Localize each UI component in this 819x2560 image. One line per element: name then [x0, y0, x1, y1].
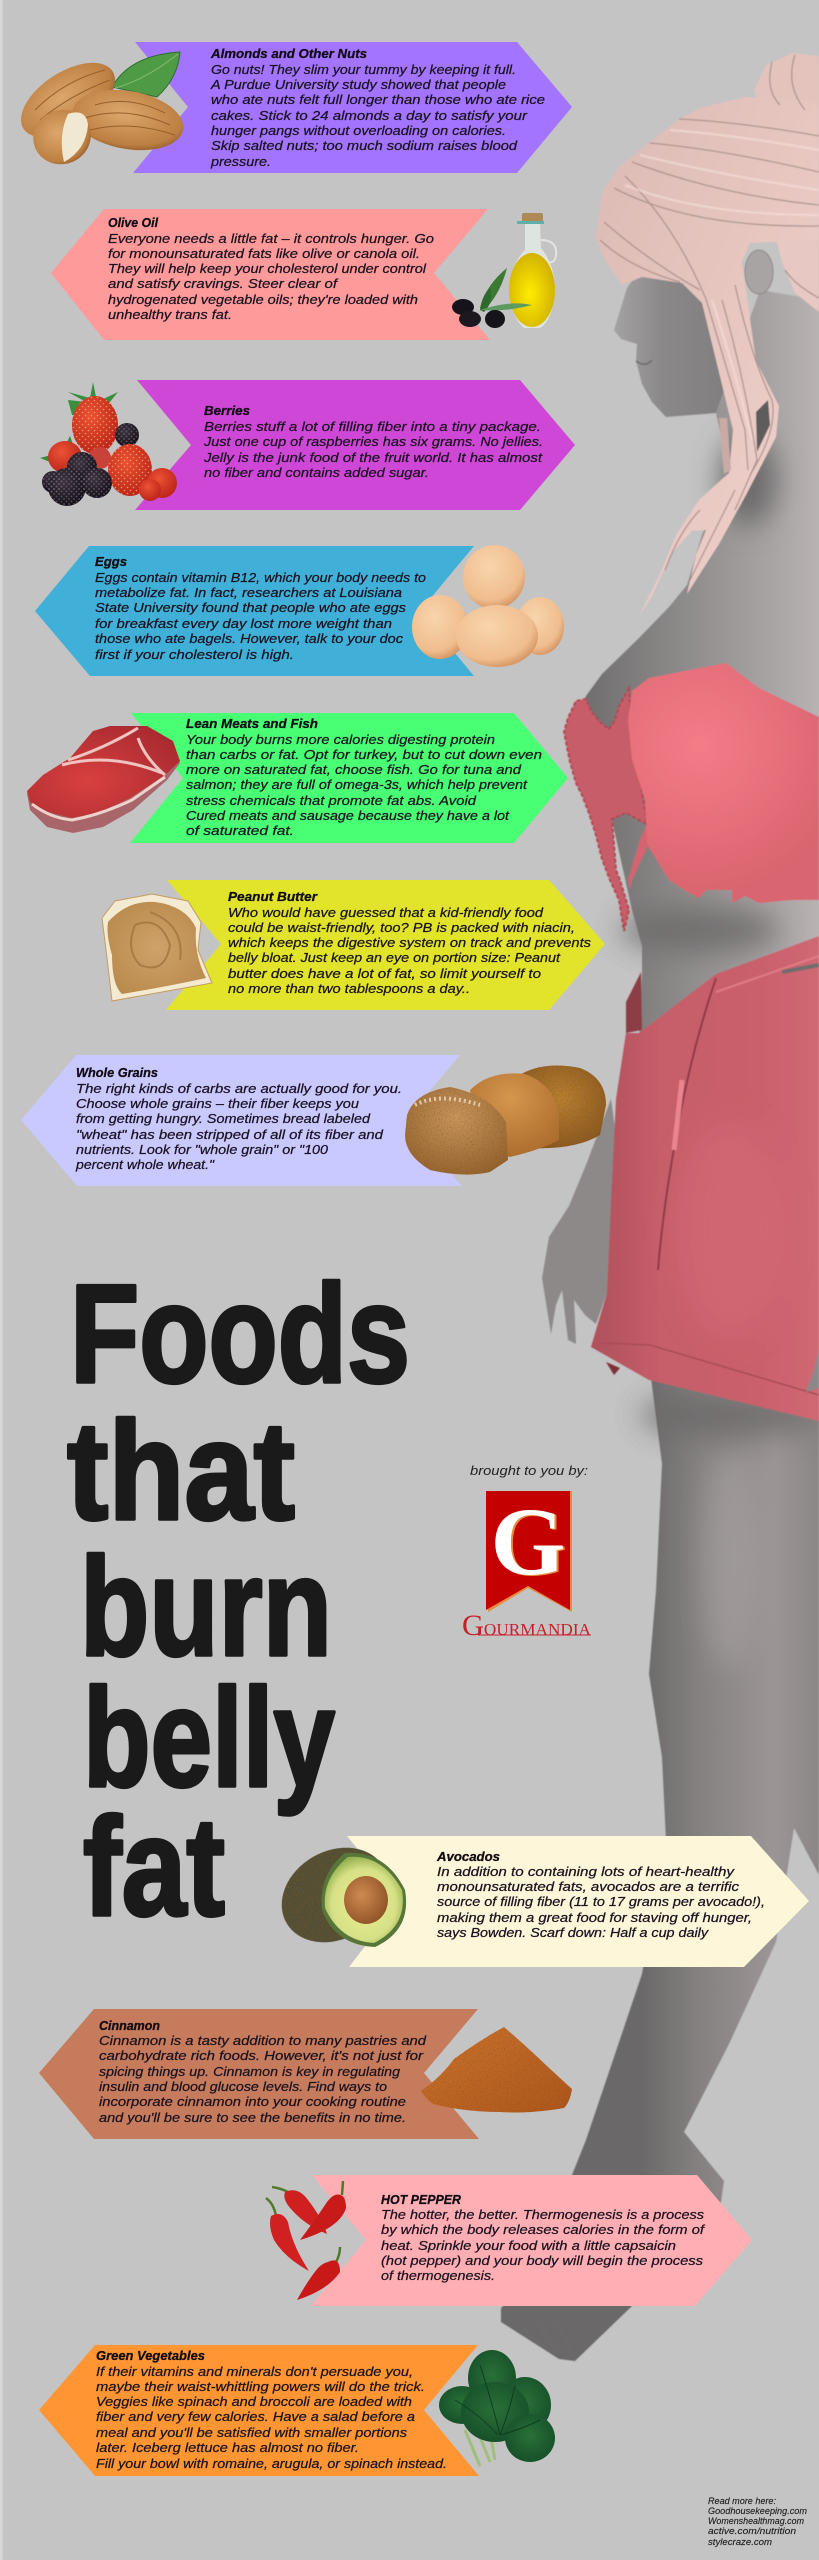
text block: lean meats and fish: of saturated fat.: [186, 823, 294, 838]
sources list: active.com/nutrition: [708, 2526, 796, 2537]
arrow banner: [51, 209, 490, 340]
panel: cinnamon: [39, 2009, 572, 2139]
text block: almonds: hunger pangs without overloading on calories.: [211, 123, 506, 138]
heading: eggs: Eggs: [95, 554, 127, 569]
text block: eggs: for breakfast every day lost more weight than: [95, 616, 392, 631]
text block: whole grains: The right kinds of carbs are actually good for you.: [76, 1081, 402, 1096]
text block: olive oil: They will help keep your cholesterol under control: [108, 261, 427, 276]
panel: eggs: [35, 540, 564, 676]
text block: lean meats and fish: salmon; they are full of omega-3s, which help prevent: [186, 777, 529, 792]
text block: avocados: says Bowden. Scarf down: Half a cup daily: [437, 1925, 710, 1940]
arrow banner: [347, 1836, 809, 1967]
arrow banner: [39, 2345, 479, 2476]
figure: arm and hand: [542, 1099, 625, 1344]
text block: avocados: monounsaturated fats, avocados are a terrific: [437, 1879, 740, 1894]
text block: whole grains: percent whole wheat.": [75, 1157, 215, 1172]
caption: brought to you by: brought to you by:: [470, 1463, 588, 1478]
text block: peanut butter: belly bloat. Just keep an eye on portion size: Peanut: [228, 950, 562, 965]
text block: peanut butter: no more than two tablespoons a day..: [228, 981, 470, 996]
icon: eggs: [412, 540, 564, 667]
text block: almonds: who ate nuts felt full longer than those who ate rice: [211, 92, 545, 107]
heading: whole grains: Whole Grains: [76, 1065, 158, 1080]
sources list: Womenshealthmag.com: [708, 2516, 804, 2527]
figure: neck and torso: [575, 290, 819, 1040]
text block: avocados: making them a great food for staving off hunger,: [437, 1910, 752, 1925]
sources list: [708, 2496, 807, 2548]
icon: bread loaves: [405, 1066, 606, 1175]
text block: green vegetables: meal and you'll be satisfied with smaller portions: [96, 2425, 408, 2440]
panel: berries: [40, 380, 575, 510]
arrow banner: [130, 713, 568, 843]
text block: olive oil: and satisfy cravings. Steer clear of: [108, 276, 339, 291]
arrow banner: [133, 42, 572, 173]
panel: olive oil: [51, 209, 556, 340]
text block: berries: Berries stuff a lot of filling fiber into a tiny package.: [204, 419, 541, 434]
text block: cinnamon: Cinnamon is a tasty addition to many pastries and: [99, 2033, 427, 2048]
sources list: Goodhousekeeping.com: [708, 2506, 807, 2517]
text block: hot pepper: heat. Sprinkle your food with a little capsaicin: [381, 2238, 676, 2253]
text block: almonds: A Purdue University study showed that people: [210, 77, 506, 92]
text block: whole grains: [75, 1081, 402, 1172]
text block: olive oil: unhealthy trans fat.: [108, 307, 232, 322]
text block: cinnamon: carbohydrate rich foods. However, it's not just for: [99, 2048, 424, 2063]
text block: hot pepper: of thermogenesis.: [381, 2268, 495, 2283]
heading: almonds: Almonds and Other Nuts: [210, 46, 367, 61]
text block: lean meats and fish: more on saturated fat, choose fish. Go for tuna and: [186, 762, 522, 777]
figure: toes: [520, 2316, 572, 2352]
panel: whole grains: [21, 1055, 606, 1186]
icon: spinach bunch: [439, 2350, 555, 2466]
text block: peanut butter: [228, 905, 592, 996]
text block: almonds: pressure.: [210, 154, 271, 169]
figure: hair: [596, 53, 819, 616]
text block: eggs: Eggs contain vitamin B12, which your body needs to: [95, 570, 426, 585]
text block: hot pepper: The hotter, the better. Thermogenesis is a process: [381, 2207, 705, 2222]
figure: top left frill: [564, 688, 646, 931]
text block: eggs: State University found that people who ate eggs: [95, 600, 407, 615]
text block: whole grains: Choose whole grains – their fiber keeps you: [76, 1096, 359, 1111]
figure: woman in profile: [501, 53, 819, 2361]
arrow banner: [166, 880, 605, 1010]
text block: eggs: those who ate bagels. However, talk to your doc: [95, 631, 404, 646]
heading: olive oil: Olive Oil: [108, 215, 158, 230]
icon: cinnamon mound: [421, 2027, 572, 2112]
title: burn: [80, 1528, 332, 1685]
text block: green vegetables: [96, 2364, 447, 2471]
panel: green vegetables: [39, 2345, 555, 2476]
heading: avocados: Avocados: [436, 1849, 500, 1864]
text block: green vegetables: maybe their waist-whittling powers will do the trick.: [96, 2379, 425, 2394]
text block: almonds: Go nuts! They slim your tummy by keeping it full.: [211, 62, 516, 77]
text block: eggs: metabolize fat. In fact, researchers at Louisiana: [95, 585, 402, 600]
icon: olive oil bottle and olives: [452, 213, 556, 328]
text block: avocados: [437, 1864, 765, 1940]
heading: berries: Berries: [204, 403, 250, 418]
text block: berries: no fiber and contains added sugar.: [204, 465, 429, 480]
text block: olive oil: hydrogenated vegetable oils; they're loaded with: [108, 292, 418, 307]
logo: Gourmandia ribbon: [462, 1488, 592, 1642]
text block: peanut butter: Who would have guessed that a kid-friendly food: [228, 905, 544, 920]
text block: lean meats and fish: Your body burns more calories digesting protein: [186, 732, 495, 747]
text block: lean meats and fish: Cured meats and sausage because they have a lot: [186, 808, 511, 823]
figure: leg: [501, 1370, 819, 2361]
panel: lean meats and fish: [27, 713, 568, 843]
text block: eggs: [95, 570, 426, 662]
text block: lean meats and fish: than carbs or fat. Opt for turkey, but to cut down even: [186, 747, 542, 762]
sources list: stylecraze.com: [708, 2537, 772, 2548]
text block: green vegetables: fiber and very few calories. Have a salad before a: [96, 2409, 415, 2424]
panel: avocados: [265, 1829, 809, 1967]
text block: whole grains: "wheat" has been stripped of all of its fiber and: [76, 1127, 384, 1142]
text block: berries: Just one cup of raspberries has six grams. No jellies.: [203, 434, 543, 449]
arrow banner: [311, 2175, 752, 2306]
text block: lean meats and fish: [186, 732, 542, 838]
arrow banner: [39, 2009, 479, 2139]
text block: peanut butter: which keeps the digestive system on track and prevents: [228, 935, 592, 950]
title: fat: [83, 1788, 225, 1945]
panel: hot pepper: [266, 2175, 752, 2306]
icon: almonds with leaf: [8, 48, 188, 172]
text block: cinnamon: insulin and blood glucose levels. Find ways to: [99, 2079, 387, 2094]
text block: whole grains: from getting hungry. Sometimes bread labeled: [76, 1111, 371, 1126]
logo: Gourmandia ribbon: G: [493, 1489, 567, 1596]
panel: almonds and other nuts: [8, 42, 572, 173]
text block: lean meats and fish: stress chemicals that promote fat abs. Avoid: [186, 793, 477, 808]
figure: face: [614, 270, 735, 417]
logo: Gourmandia ribbon: GOURMANDIA: [462, 1609, 592, 1642]
icon: avocado halves: [265, 1829, 406, 1961]
text block: peanut butter: butter does have a lot of fat, so limit yourself to: [228, 966, 541, 981]
logo: Gourmandia ribbon: G: [491, 1488, 565, 1595]
text block: eggs: first if your cholesterol is high.: [95, 647, 294, 662]
title: Foods: [70, 1255, 410, 1412]
text block: olive oil: [108, 231, 434, 322]
heading: peanut butter: Peanut Butter: [228, 889, 318, 904]
text block: hot pepper: (hot pepper) and your body will begin the process: [381, 2253, 704, 2268]
text block: almonds: [210, 62, 545, 169]
heading: cinnamon: Cinnamon: [99, 2018, 160, 2033]
figure: skirt: [591, 936, 819, 1421]
text block: green vegetables: If their vitamins and minerals don't persuade you,: [96, 2364, 413, 2379]
text block: hot pepper: [381, 2207, 706, 2283]
text block: hot pepper: by which the body releases calories in the form of: [381, 2222, 706, 2237]
title: that: [67, 1392, 295, 1549]
text block: green vegetables: later. Iceberg lettuce has almost no fiber.: [96, 2440, 359, 2455]
figure: top main cup: [628, 663, 819, 903]
figure: ear: [745, 250, 773, 294]
text block: avocados: source of filling fiber (11 to 17 grams per avocado!),: [437, 1894, 765, 1909]
text block: olive oil: Everyone needs a little fat – it controls hunger. Go: [108, 231, 434, 246]
sources list: Read more here:: [708, 2496, 776, 2507]
icon: strawberries and blackberries: [40, 382, 177, 506]
text block: olive oil: for monounsaturated fats like olive or canola oil.: [108, 246, 420, 261]
title: belly: [83, 1659, 335, 1816]
sponsor credit: [462, 1463, 592, 1642]
text block: whole grains: nutrients. Look for "whole grain" or "100: [76, 1142, 329, 1157]
arrow banner: [35, 546, 474, 676]
text block: almonds: cakes. Stick to 24 almonds a day to satisfy your: [211, 108, 528, 123]
text block: cinnamon: and you'll be sure to see the benefits in no time.: [99, 2110, 406, 2125]
heading: lean meats and fish: Lean Meats and Fish: [186, 716, 318, 731]
heading: hot pepper: HOT PEPPER: [381, 2192, 462, 2207]
icon: red chili peppers: [266, 2181, 346, 2300]
text block: berries: Jelly is the junk food of the fruit world. It has almost: [203, 450, 544, 465]
arrow banner: [21, 1055, 462, 1186]
panel: peanut butter: [102, 880, 605, 1010]
arrow banner: [135, 380, 575, 510]
text block: cinnamon: spicing things up. Cinnamon is key in regulating: [99, 2064, 401, 2079]
title: [67, 1255, 410, 1945]
text block: avocados: In addition to containing lots of heart-healthy: [437, 1864, 736, 1879]
text block: berries: [203, 419, 544, 480]
icon: toast with peanut butter: [102, 894, 212, 1001]
text block: green vegetables: Veggies like spinach and broccoli are loaded with: [96, 2394, 412, 2409]
heading: green vegetables: Green Vegetables: [96, 2348, 205, 2363]
icon: steak: [27, 726, 180, 833]
text block: cinnamon: incorporate cinnamon into your cooking routine: [99, 2094, 406, 2109]
text block: cinnamon: [99, 2033, 427, 2125]
text block: almonds: Skip salted nuts; too much sodium raises blood: [211, 138, 518, 153]
text block: green vegetables: Fill your bowl with romaine, arugula, or spinach instead.: [96, 2456, 447, 2471]
text block: peanut butter: could be waist-friendly, too? PB is packed with niacin,: [228, 920, 575, 935]
